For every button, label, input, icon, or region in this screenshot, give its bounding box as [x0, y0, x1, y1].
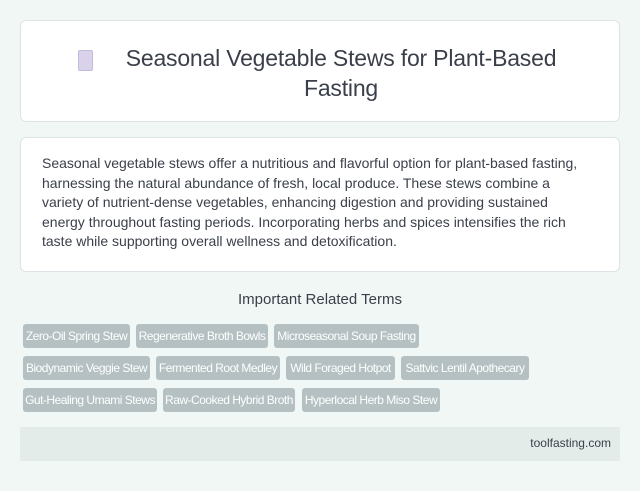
description panel: [20, 137, 620, 272]
tags: Regenerative Broth Bowls: [139, 329, 265, 343]
header panel: [20, 20, 620, 122]
tags: Gut-Healing Umami Stews: [25, 393, 155, 407]
tags: Sattvic Lentil Apothecary: [406, 361, 524, 375]
tags: Hyperlocal Herb Miso Stew: [305, 393, 437, 407]
footer: [20, 427, 620, 461]
tags: Fermented Root Medley: [159, 361, 277, 375]
description text: Seasonal vegetable stews offer a nutritious and flavorful option for plant-based fasting, harnessing the natural abundance of fresh, local produce. These stews combine a variety of nutrient-dense vegetables, enhancing digestion and providing sustained energy throughout fasting periods. Incorporating herbs and spices intensifies the rich taste while supporting overall wellness and detoxification.: [42, 155, 577, 249]
tags: Biodynamic Veggie Stew: [26, 361, 147, 375]
terms heading: Important Related Terms: [238, 291, 402, 308]
title: Seasonal Vegetable Stews for Plant-Based Fasting: [126, 45, 556, 101]
tags: Zero-Oil Spring Stew: [26, 329, 127, 343]
icon: document: [78, 50, 93, 71]
tags: Wild Foraged Hotpot: [290, 361, 391, 375]
footer text: toolfasting.com: [530, 436, 611, 450]
tags: Microseasonal Soup Fasting: [277, 329, 416, 343]
tags: Raw-Cooked Hybrid Broth: [165, 393, 293, 407]
